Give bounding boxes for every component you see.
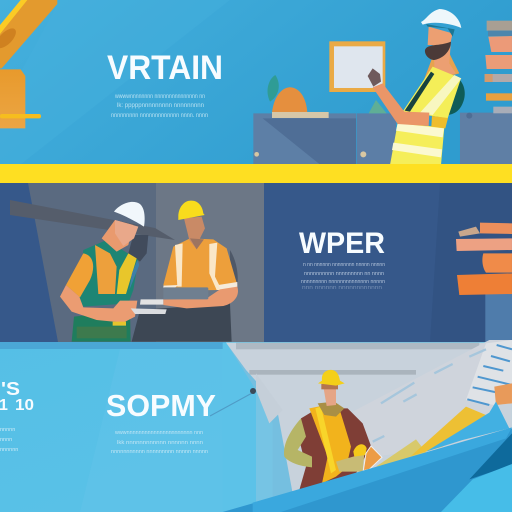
icon: orange brick stack — [456, 223, 512, 343]
heading: VRTAIN: VRTAIN — [107, 49, 223, 87]
yellow sheets — [376, 439, 429, 467]
divider: yellow band — [0, 164, 512, 183]
text block: top description: nnnnnnnnn nnnnnnnnnnnnn nnnn. nnnn — [111, 113, 208, 119]
figure: right worker with yellow hard hat — [132, 201, 238, 342]
blue foreground shapes — [223, 427, 512, 512]
gray background wall — [226, 343, 512, 512]
text block: middle description: nnnnnnnnn nnnnnnnnnnnnnn nnnnn — [301, 279, 385, 285]
left cropped number fragments — [0, 379, 34, 414]
figure: worker with yellow hard hat — [284, 370, 382, 490]
figure: left worker with white hard hat — [60, 202, 167, 342]
icon: brick stack right — [485, 21, 512, 113]
beam — [10, 200, 175, 240]
text block: middle description: nnn nnnnnn nnnnnnnnnnnn — [302, 285, 382, 291]
icon: orange dome — [272, 87, 307, 113]
illustration: two workers — [60, 201, 238, 342]
text block: top description: lk: pppppnnnnnnnnn nnnnnnnnn — [117, 103, 204, 109]
text block: middle description — [301, 262, 385, 291]
icon: leaf — [268, 75, 279, 102]
text block: bottom description: lkk nnnnnnnnnnnn nnnnnn nnnn — [117, 440, 203, 446]
illustration: machinery base — [253, 9, 512, 165]
ramp with ribs — [353, 340, 512, 457]
text block: top description — [111, 94, 208, 119]
hat — [421, 9, 461, 28]
text block: left cropped description: nnnnn — [0, 427, 15, 433]
text block: middle description: nnnnnnnnnn nnnnnnnnn nn nnnn — [304, 271, 384, 277]
panel: bottom light-blue section — [0, 340, 512, 512]
figure: man with white hard hat — [368, 9, 465, 165]
face — [428, 27, 453, 45]
panel: top blue section — [0, 0, 512, 165]
text block: bottom description: wwwnnnnnnnnnnnnnnnnnnnnnn nnn — [114, 430, 203, 436]
text block: left cropped description: nnnn — [0, 437, 12, 443]
text block: top description: wwwwnnnnnnnn nnnnnnnnnnnnnnn nn — [114, 94, 205, 100]
text block: left cropped description: nnnnnn — [0, 447, 18, 453]
heading: SOPMY: SOPMY — [106, 388, 216, 423]
left cropped number fragments: 'S — [1, 379, 20, 399]
text block: left cropped description — [0, 427, 18, 453]
text block: bottom description: nnnnnnnnnnn nnnnnnnnn nnnnn nnnnn — [111, 449, 208, 455]
connector line — [210, 392, 254, 416]
text block: middle description: n nn nnnnnn nnnnnnnn nnnnn nnnnn — [303, 262, 385, 268]
icon: framed board — [329, 41, 385, 92]
heading: WPER: WPER — [299, 227, 385, 260]
left cropped number fragments: 10 — [15, 397, 34, 414]
arm — [373, 83, 429, 126]
icon: crane arm and orange box — [0, 0, 57, 128]
text block: bottom description — [111, 430, 208, 455]
illustration: worker on ramp — [223, 340, 512, 512]
panel: middle navy section — [0, 183, 512, 343]
